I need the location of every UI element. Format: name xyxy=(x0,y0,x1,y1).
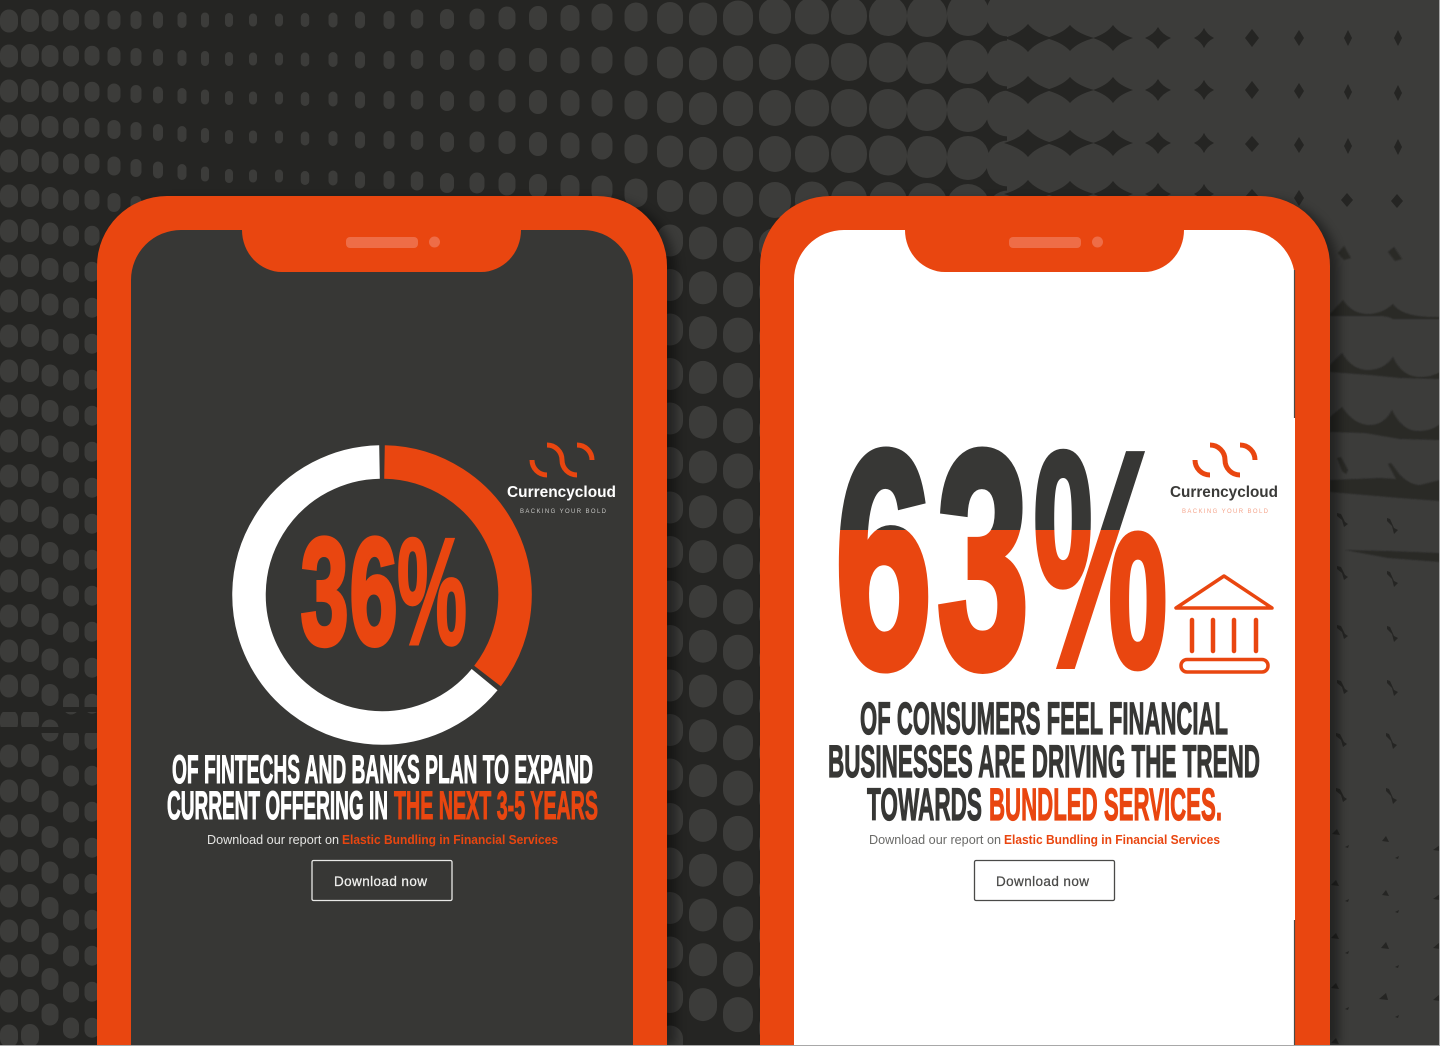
right phone frame xyxy=(760,196,1330,1046)
icon: bank building xyxy=(1176,576,1272,672)
headline: fintechs and banks: CURRENT OFFERING IN xyxy=(167,784,388,828)
logo: Currencycloud xyxy=(507,445,616,515)
panel: right phone, white screen with 63% statistic xyxy=(760,196,1339,1046)
logo: Currencycloud: Currencycloud xyxy=(507,484,616,501)
donut chart: 36 percent xyxy=(249,462,515,728)
button: download now xyxy=(974,860,1114,900)
panel: left phone, dark screen with 36% statistic xyxy=(97,196,676,1046)
report line: Download our report on xyxy=(869,832,1001,847)
logo: Currencycloud xyxy=(1170,445,1278,515)
statistic: 36%: 3 xyxy=(301,507,349,677)
report line: Elastic Bundling in Financial Services xyxy=(1004,832,1220,847)
statistic: 63% two-tone: 6 xyxy=(835,388,932,732)
report line xyxy=(869,832,1220,847)
right phone speaker and camera xyxy=(1009,236,1103,248)
headline: fintechs and banks xyxy=(167,748,598,828)
statistic: 63% two-tone xyxy=(835,388,1168,732)
panel: left phone, dark screen with 36% statistic: THE NEXT 3-5 YEARS xyxy=(394,784,598,828)
panel: right phone, white screen with 63% statistic: % xyxy=(1033,388,1168,732)
bowtie marks on right edge xyxy=(1331,513,1440,1044)
button: download now: Download now xyxy=(334,874,427,889)
logo: Currencycloud: Currencycloud xyxy=(1170,484,1278,501)
panel: left phone, dark screen with 36% statistic: OF FINTECHS AND BANKS PLAN TO EXPAND xyxy=(172,748,593,792)
report line xyxy=(207,832,558,847)
left phone frame xyxy=(97,196,667,1046)
statistic: 63% two-tone: 3 xyxy=(937,388,1029,732)
headline: consumers feel: TOWARDS xyxy=(867,779,982,830)
left phone screen xyxy=(131,230,633,1046)
button: download now: Download now xyxy=(996,874,1089,889)
right phone screen xyxy=(794,230,1295,1046)
headline: consumers feel xyxy=(828,693,1260,830)
button: download now xyxy=(312,860,452,900)
report line: Download our report on xyxy=(207,832,339,847)
statistic: 36%: % xyxy=(397,507,467,677)
scallop bands on right edge xyxy=(1330,246,1440,501)
logo: Currencycloud: BACKING YOUR BOLD xyxy=(1182,509,1269,515)
left phone speaker and camera xyxy=(346,236,440,248)
statistic: 36%: 6 xyxy=(350,507,398,677)
report line: Elastic Bundling in Financial Services xyxy=(342,832,558,847)
statistic: 36% xyxy=(301,507,467,677)
logo: Currencycloud: BACKING YOUR BOLD xyxy=(520,509,607,515)
